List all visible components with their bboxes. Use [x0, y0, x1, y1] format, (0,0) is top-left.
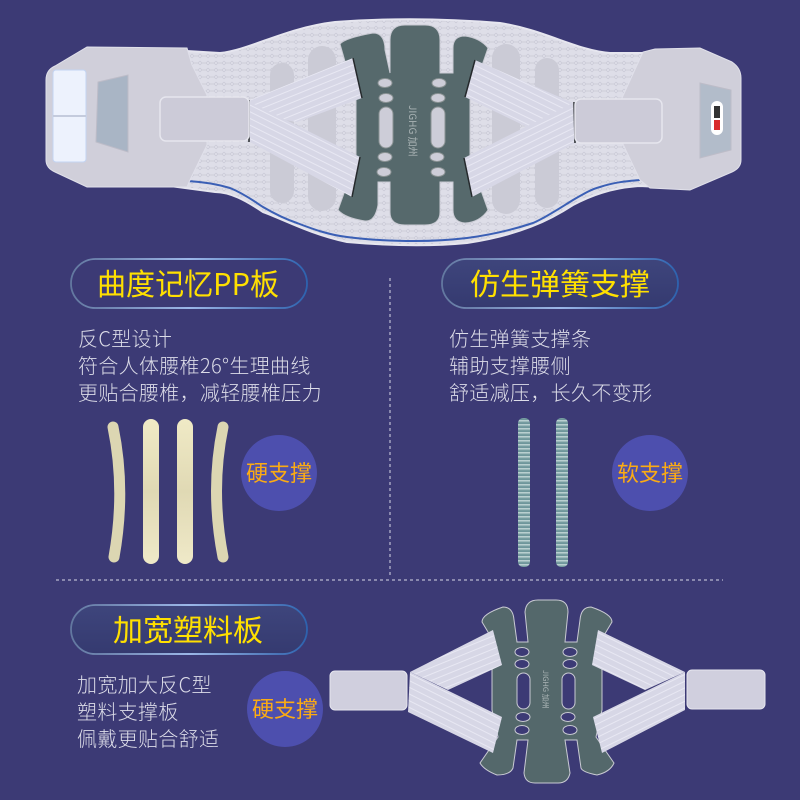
badge: soft support: 软支撑 [617, 456, 683, 488]
plate brand mark: JIGHG 加州 [406, 105, 421, 157]
text block: bionic spring [449, 323, 652, 406]
vertical dashed divider [389, 278, 391, 575]
support ribs left [270, 46, 336, 211]
text block: PP board: 更贴合腰椎，减轻腰椎压力 [78, 377, 322, 406]
belt mesh body [170, 19, 660, 245]
icon: spring strips [518, 418, 568, 567]
support ribs right [492, 44, 559, 214]
horizontal dashed divider [56, 579, 723, 581]
plastic plate [480, 600, 614, 783]
left white window [53, 70, 86, 162]
badge: hard support: 硬支撑 [246, 456, 312, 488]
text block: PP board [78, 323, 322, 406]
right label patch [700, 83, 731, 158]
left straps [160, 58, 362, 197]
heading pill: PP board: 曲度记忆PP板 [97, 260, 279, 304]
text block: bionic spring: 舒适减压，长久不变形 [449, 377, 652, 406]
text block: widened plastic board: 佩戴更贴合舒适 [77, 723, 219, 752]
text block: PP board: 符合人体腰椎26°生理曲线 [78, 350, 311, 379]
right cuff [622, 48, 741, 190]
heading pill: widened plastic board: 加宽塑料板 [113, 606, 263, 650]
heading pill: bionic spring [442, 259, 678, 308]
heading pill: widened plastic board [71, 605, 307, 654]
badge: hard support lower: 硬支撑 [252, 692, 318, 724]
heading pill: bionic spring: 仿生弹簧支撑 [470, 260, 650, 304]
text block: bionic spring: 仿生弹簧支撑条 [449, 323, 591, 352]
text block: PP board: 反C型设计 [78, 323, 172, 352]
badge: hard support lower [247, 671, 323, 747]
text block: bionic spring: 辅助支撑腰侧 [449, 350, 571, 379]
left grey patch [96, 75, 128, 152]
text block: widened plastic board: 塑料支撑板 [77, 696, 179, 725]
text block: widened plastic board [77, 669, 219, 752]
plate and straps product photo [330, 600, 765, 783]
icon: PP support bars [113, 419, 223, 564]
right straps [464, 60, 662, 197]
left cuff [46, 47, 207, 187]
text block: widened plastic board: 加宽加大反C型 [77, 669, 212, 698]
plate brand mark lower: JIGHG 加州 [540, 670, 551, 709]
left straps lower [330, 630, 502, 753]
badge: hard support [241, 435, 317, 511]
support plate [338, 25, 488, 225]
belt blue piping [188, 180, 640, 241]
lumbar belt product photo [46, 19, 741, 245]
badge: soft support [612, 435, 688, 511]
right straps lower [592, 630, 765, 753]
